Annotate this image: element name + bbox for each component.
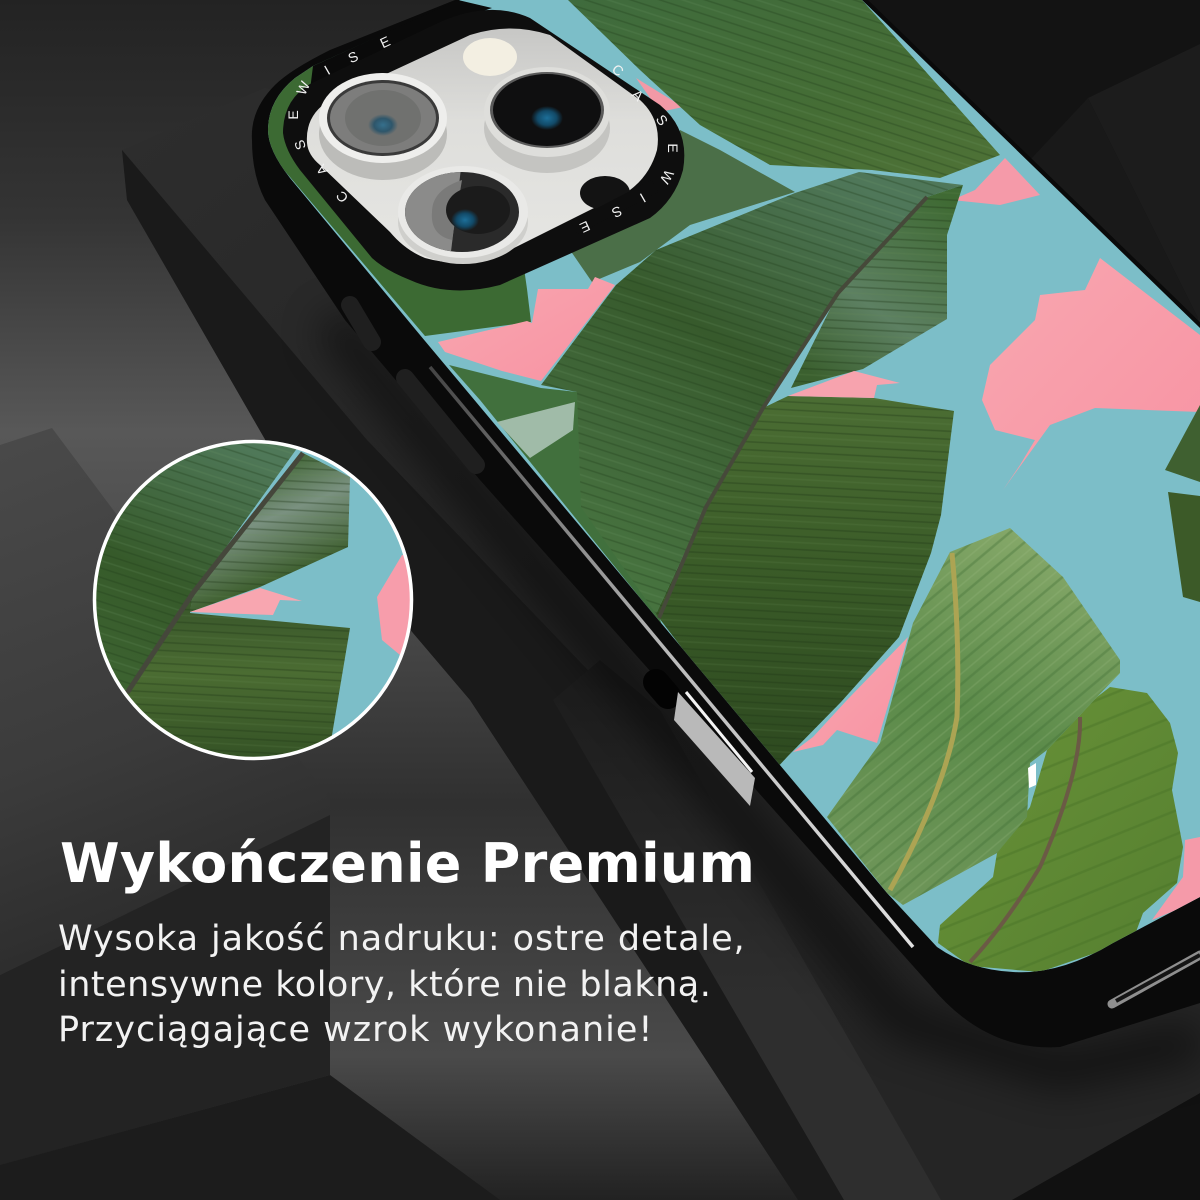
flower: bottom right bbox=[1152, 837, 1200, 920]
chrome power button bbox=[674, 692, 755, 806]
black ring lower edge over sensor bbox=[574, 186, 655, 228]
zoomed midrib bbox=[127, 453, 303, 693]
brand ring text: I bbox=[637, 190, 649, 206]
brand ring text: S bbox=[653, 112, 671, 128]
brand ring text: W bbox=[293, 78, 313, 97]
leaf: lower light bbox=[827, 528, 1120, 905]
leaf: central midrib bbox=[659, 197, 927, 618]
phone case body bbox=[252, 0, 1200, 1047]
top right background blocks bbox=[860, 0, 1200, 322]
side buttons bbox=[350, 305, 476, 465]
zoomed leaf: left blade bbox=[96, 443, 296, 694]
case rim above camera bbox=[310, 0, 492, 90]
lens: bottom bbox=[398, 160, 528, 264]
flower: top right bbox=[952, 158, 1040, 205]
leaf: central lower blade bbox=[656, 396, 954, 770]
flash bbox=[463, 38, 517, 76]
leaf: small left highlight bbox=[497, 402, 575, 458]
flower: centre tip bbox=[788, 371, 900, 398]
leaf: small left base bbox=[449, 365, 662, 625]
brand ring text: A bbox=[312, 161, 331, 178]
brand ring text: C bbox=[609, 61, 627, 79]
camera glass bbox=[307, 28, 658, 262]
flower: lower bbox=[793, 637, 908, 752]
phone shadow bbox=[330, 320, 1200, 1070]
heading: Wykończenie Premium bbox=[60, 832, 755, 895]
flower: large right bbox=[982, 258, 1200, 490]
brand ring text: E bbox=[577, 218, 593, 236]
flower: top sliver bbox=[636, 78, 683, 112]
zoomed flower right bbox=[377, 555, 410, 655]
leaf: top bbox=[568, 0, 1000, 178]
brand ring text: A bbox=[629, 86, 647, 104]
bottom port bbox=[1112, 955, 1200, 1004]
white speck bbox=[1028, 763, 1036, 788]
leaf: upper middle bbox=[570, 130, 795, 282]
lens: top right bbox=[484, 67, 610, 173]
zoomed leaf: lower blade bbox=[128, 599, 350, 757]
brand ring text: S bbox=[609, 203, 625, 221]
lens: left bbox=[319, 73, 447, 180]
brand ring text: I bbox=[321, 62, 333, 78]
body text bbox=[58, 919, 746, 1050]
leaf: central left blade bbox=[541, 172, 963, 614]
brand ring text: S bbox=[291, 138, 309, 152]
brand ring text bbox=[285, 33, 681, 236]
body text: Przyciągające wzrok wykonanie! bbox=[58, 1010, 653, 1050]
zoomed flower tip bbox=[190, 588, 302, 615]
leaf: right edge lower bbox=[1168, 492, 1200, 602]
brand ring text: E bbox=[377, 33, 393, 51]
magnified detail circle bbox=[85, 440, 420, 770]
chrome edge highlight bbox=[430, 367, 913, 947]
leaf: right edge upper bbox=[1165, 405, 1200, 482]
brand ring text: W bbox=[656, 167, 677, 187]
flower: pink left bbox=[438, 277, 615, 381]
brand ring text: E bbox=[285, 110, 301, 120]
brand ring text: E bbox=[665, 143, 681, 153]
body text: Wysoka jakość nadruku: ostre detale, bbox=[58, 919, 746, 959]
brand ring text: C bbox=[333, 188, 351, 206]
leaf: behind camera bbox=[268, 58, 531, 336]
leaf: lower right bbox=[938, 687, 1183, 972]
brand ring text: S bbox=[345, 48, 361, 66]
zoomed leaf: right blade bbox=[190, 453, 350, 612]
camera island bbox=[283, 10, 684, 290]
leaf: central right blade bbox=[791, 185, 963, 388]
block: lower left step bbox=[0, 428, 500, 1200]
body text: intensywne kolory, które nie blakną. bbox=[58, 964, 711, 1004]
sensor bbox=[580, 176, 630, 210]
phone screen artwork: tropical leaves and flowers bbox=[268, 0, 1200, 972]
